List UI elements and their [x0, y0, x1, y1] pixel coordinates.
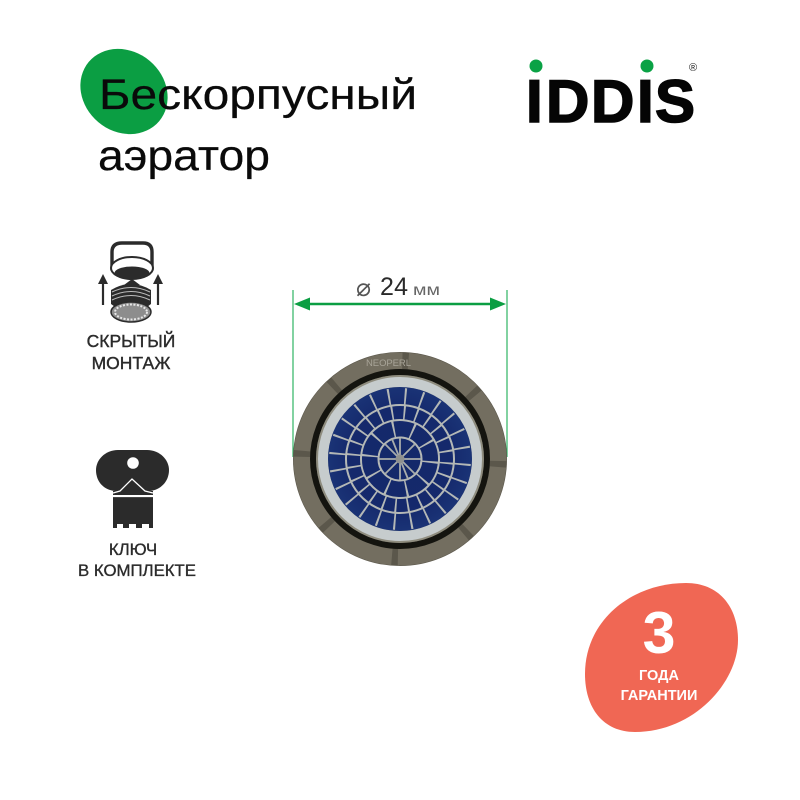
warranty text: ГАРАНТИИ: [621, 688, 697, 704]
label: hidden mounting: СКРЫТЫЙ: [87, 330, 175, 351]
dimension: diameter 24 mm: [293, 273, 507, 457]
title: Бескорпусный: [99, 72, 417, 119]
dimension: diameter 24 mm: ⌀: [356, 273, 371, 302]
logo: IDDIS: ®: [689, 62, 697, 74]
label: key included: КЛЮЧ: [109, 540, 157, 559]
aerator photo: NEOPERL: [366, 358, 411, 369]
dimension: diameter 24 mm: 24: [380, 273, 408, 301]
label: key included: В КОМПЛЕКТЕ: [78, 561, 196, 580]
label: key included: [78, 540, 196, 580]
label: hidden mounting: [87, 330, 175, 373]
warranty blob: [585, 583, 738, 732]
warranty text: ГОДА: [639, 668, 679, 684]
title: [98, 72, 417, 180]
blue mesh: [328, 387, 472, 531]
icon: key: [96, 450, 169, 528]
logo: IDDIS: IDDIS: [526, 68, 695, 135]
label: hidden mounting: МОНТАЖ: [92, 353, 170, 373]
title: аэратор: [98, 133, 270, 180]
aerator photo: [293, 352, 507, 566]
mesh centre star: [379, 438, 421, 480]
outer lugs: [302, 361, 498, 557]
icon: hidden mounting aerator: [98, 243, 163, 322]
warranty text: [621, 600, 697, 704]
dimension: diameter 24 mm: мм: [413, 282, 440, 299]
warranty text: 3: [643, 600, 675, 666]
title accent blob: [63, 31, 185, 152]
